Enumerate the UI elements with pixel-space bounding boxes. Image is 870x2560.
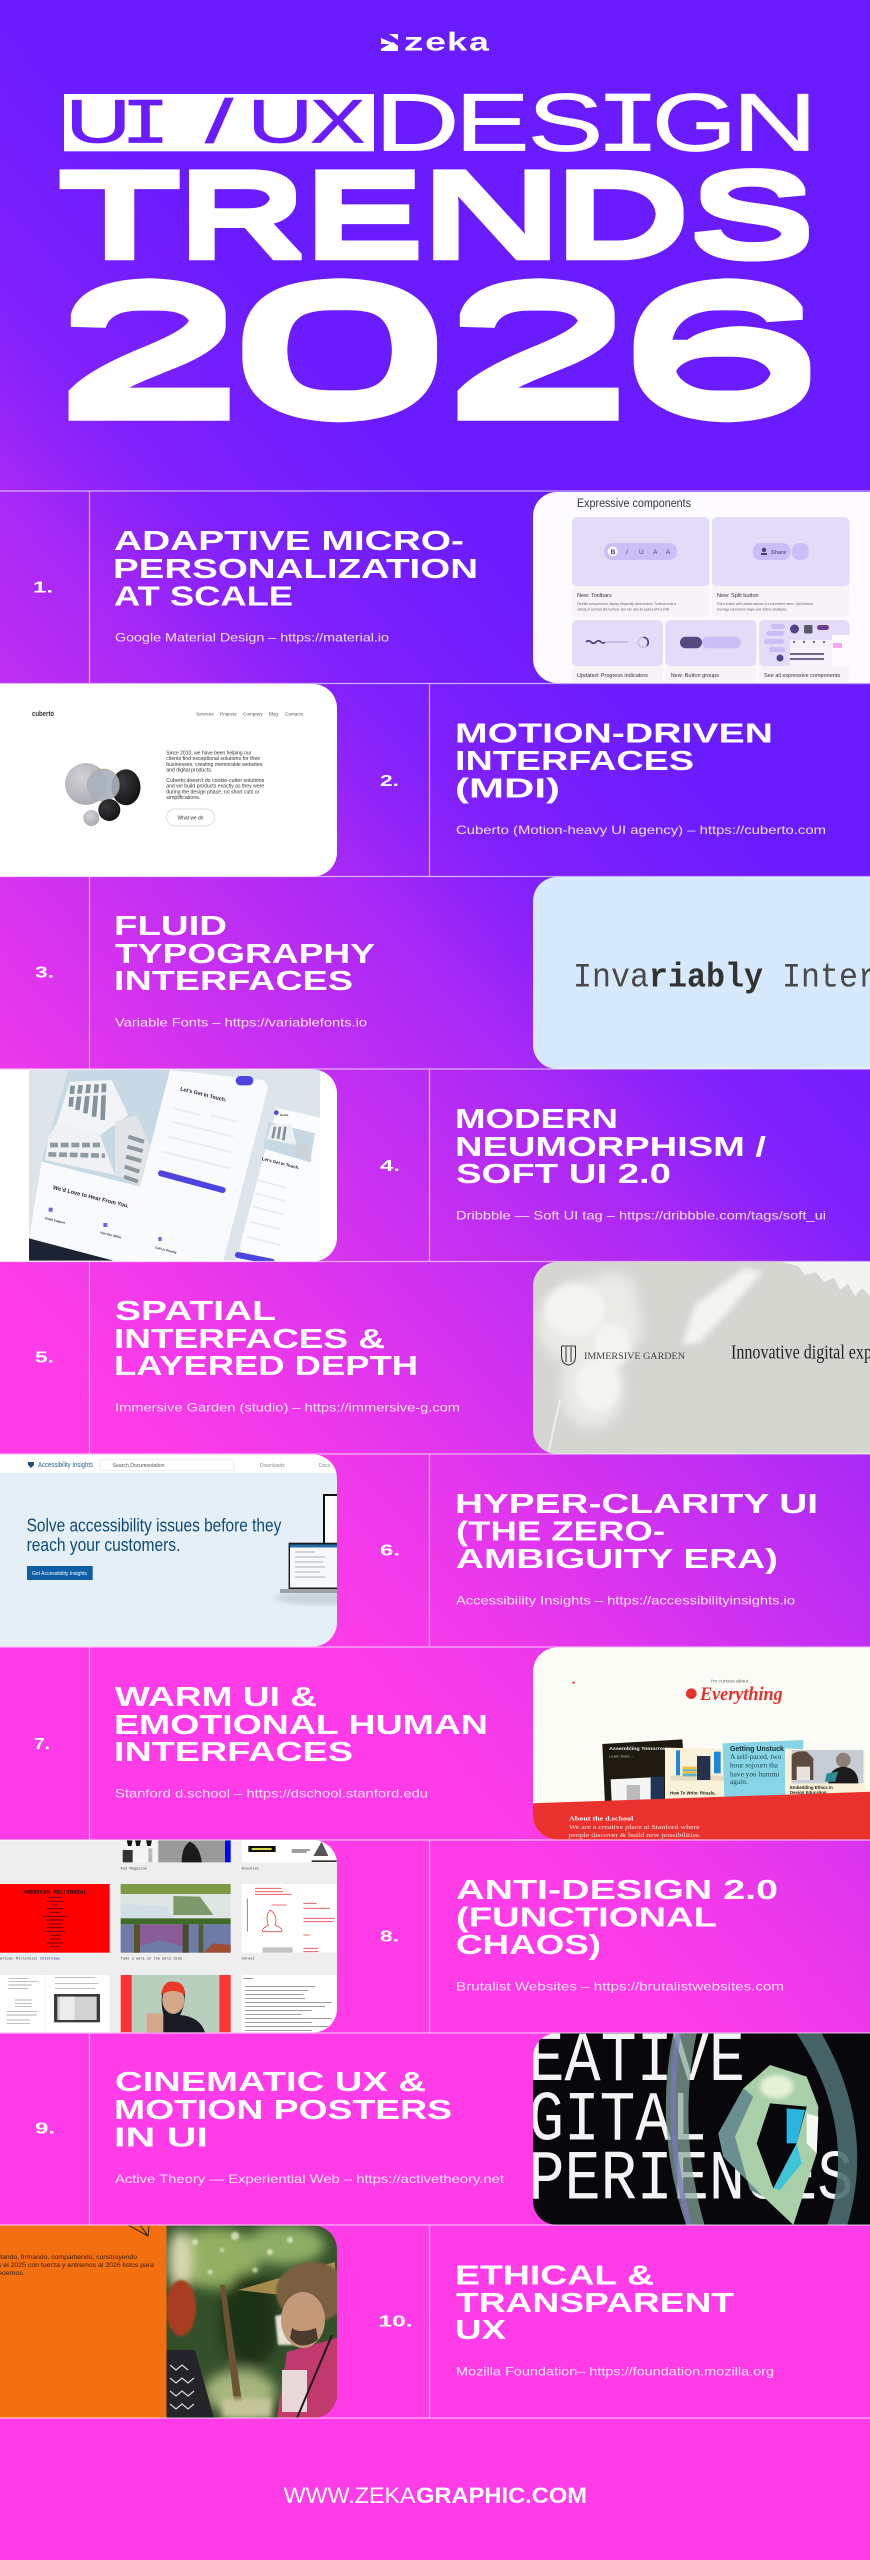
row 5 bbox=[35, 1262, 870, 1454]
heading: MOTION-DRIVEN bbox=[455, 718, 773, 748]
title line: DESIGN: I bbox=[595, 80, 661, 177]
screenshot: Material expressive components bbox=[533, 491, 870, 690]
screenshot: soft UI contact page bbox=[0, 1069, 337, 1262]
screenshot: Stanford d.school: people discover & build new possibilities. bbox=[568, 1832, 701, 1839]
screenshot: Cuberto site: Projects bbox=[220, 712, 237, 717]
heading: ETHICAL & bbox=[455, 2259, 654, 2290]
screenshot: Cuberto site: Services bbox=[196, 712, 214, 717]
screenshot: Cuberto site: businesses, creating memorable websites bbox=[166, 762, 263, 768]
screenshot: Stanford d.school: Assembling Tomorrow bbox=[609, 1746, 667, 1752]
number: 8. bbox=[380, 1929, 399, 1946]
screenshot: Mozilla Foundation video bbox=[0, 2225, 348, 2418]
screenshot: Stanford d.school: Getting Unstuck bbox=[730, 1746, 784, 1753]
screenshot: Cuberto site: during the design phase, no short cuts or bbox=[166, 790, 260, 796]
screenshot: Stanford d.school: We are a creative place at Stanford where bbox=[569, 1824, 700, 1831]
screenshot: soft UI contact page: Hotka bbox=[280, 1113, 289, 1117]
screenshot: Stanford d.school: Design Education bbox=[790, 1790, 827, 1795]
heading: INTERFACES & bbox=[114, 1323, 385, 1354]
screenshot: Material expressive components: New: Split button bbox=[717, 593, 759, 599]
screenshot: Stanford d.school: Embedding Ethics in bbox=[790, 1785, 833, 1790]
screenshot: Cuberto site: and digital products. bbox=[166, 768, 212, 774]
screenshot: Stanford d.school: About the d.school bbox=[569, 1815, 634, 1822]
title line: TRENDS: S bbox=[689, 146, 816, 284]
screenshot: Material expressive components: variety of controls like buttons, and can also be paired with a FAB. bbox=[577, 607, 670, 611]
heading: SOFT UI 2.0 bbox=[456, 1158, 671, 1189]
screenshot: Material expressive components: Updated: Progress indicators bbox=[577, 673, 648, 679]
screenshot: Accessibility Insights: Search Documentation bbox=[113, 1463, 165, 1469]
logo: zeka: zeka bbox=[403, 28, 490, 58]
screenshot: Accessibility Insights: Get Accessibility Insights bbox=[32, 1571, 87, 1577]
screenshot: Mozilla Foundation video: rtando, firmando, compartiendo, construyendo bbox=[0, 2254, 137, 2261]
number: 6. bbox=[380, 1543, 400, 1560]
number: 4. bbox=[380, 1158, 400, 1175]
number: 7. bbox=[34, 1736, 50, 1753]
screenshot: Brutalist Websites gallery bbox=[0, 1840, 337, 2033]
heading bbox=[113, 525, 478, 612]
number: 2. bbox=[380, 773, 399, 790]
heading: AMBIGUITY ERA) bbox=[456, 1543, 778, 1574]
screenshot: Accessibility Insights: Docs bbox=[319, 1463, 331, 1469]
source: Mozilla Foundation– https://foundation.mozilla.org bbox=[456, 2364, 774, 2378]
heading: SPATIAL bbox=[115, 1295, 276, 1326]
screenshot: Accessibility Insights bbox=[0, 1454, 365, 1647]
heading: UX bbox=[455, 2314, 506, 2345]
heading: CHAOS) bbox=[456, 1929, 601, 1960]
source: Dribbble — Soft UI tag – https://dribbble.com/tags/soft_ui bbox=[456, 1209, 826, 1223]
source: Active Theory — Experiential Web – https://activetheory.net bbox=[115, 2172, 505, 2186]
row 1 bbox=[33, 491, 870, 690]
screenshot: Material expressive components: leverage expressive shape and motion strategies. bbox=[717, 607, 787, 611]
source: Accessibility Insights – https://accessibilityinsights.io bbox=[456, 1593, 795, 1607]
title line: 2026: 0 bbox=[217, 246, 463, 455]
title line: TRENDS: D bbox=[553, 146, 692, 284]
screenshot: Stanford d.school: have you hummi bbox=[730, 1769, 779, 1778]
screenshot: Brutalist Websites gallery: Take a walk on the Wild Side bbox=[121, 1956, 182, 1961]
heading: CINEMATIC UX & bbox=[115, 2066, 426, 2097]
row 3 bbox=[35, 877, 870, 1069]
number: 1. bbox=[33, 580, 53, 597]
screenshot: Stanford d.school: hour sojourn tha bbox=[730, 1761, 779, 1770]
screenshot: Cuberto site: Since 2010, we have been helping our bbox=[166, 750, 252, 756]
screenshot: Cuberto site bbox=[0, 684, 337, 877]
heading: EMOTIONAL HUMAN bbox=[114, 1709, 488, 1740]
row 4 bbox=[0, 1069, 826, 1262]
screenshot: Stanford d.school: I'm curious about... bbox=[711, 1678, 753, 1684]
title line: DESIGN: G bbox=[652, 78, 737, 169]
heading: HYPER-CLARITY UI bbox=[455, 1488, 818, 1519]
heading: TYPOGRAPHY bbox=[115, 938, 375, 969]
heading: FLUID bbox=[114, 910, 227, 941]
title line: TRENDS: E bbox=[303, 146, 426, 284]
screenshot: Material expressive components: A bbox=[666, 549, 671, 556]
screenshot: Material expressive components: Flexible component to display frequently used actions. Toolbars hold a bbox=[577, 602, 676, 606]
screenshot: Stanford d.school bbox=[530, 1647, 870, 1845]
heading: TRANSPARENT bbox=[456, 2287, 734, 2318]
screenshot: Cuberto site: Blog bbox=[269, 712, 278, 717]
screenshot: Stanford d.school: A self-paced, two bbox=[730, 1752, 782, 1761]
title line: DESIGN: N bbox=[732, 78, 818, 169]
screenshot: Accessibility Insights: reach your customers. bbox=[27, 1535, 180, 1555]
screenshot: Material expressive components: Pair a button with related actions in a connected menu. Split buttons bbox=[717, 602, 813, 606]
screenshot: Brutalist Websites gallery: Blocklet bbox=[242, 1866, 259, 1871]
screenshot: Cuberto site: cuberto bbox=[32, 709, 54, 718]
screenshot: Cuberto site: Company bbox=[243, 712, 263, 717]
heading: (MDI) bbox=[455, 772, 560, 804]
screenshot: Accessibility Insights: Accessibility Insights bbox=[38, 1462, 93, 1469]
heading bbox=[114, 1295, 418, 1381]
title line: DESIGN: S bbox=[528, 78, 603, 169]
screenshot: Material expressive components: B bbox=[611, 549, 616, 556]
title line: DESIGN: E bbox=[455, 78, 530, 169]
heading: AT SCALE bbox=[114, 580, 293, 612]
screenshot: Cuberto site: clients find exceptional solutions for their bbox=[166, 756, 261, 762]
source: Google Material Design – https://material.io bbox=[115, 631, 389, 645]
screenshot: Material expressive components: A bbox=[653, 549, 658, 556]
screenshot: Stanford d.school: again. bbox=[730, 1777, 748, 1786]
source: Stanford d.school – https://dschool.stanford.edu bbox=[115, 1787, 428, 1801]
screenshot: Material expressive components: New: Button groups bbox=[671, 673, 719, 679]
screenshot: Material expressive components: See all expressive components bbox=[764, 673, 840, 679]
screenshot: Accessibility Insights: Solve accessibility issues before they bbox=[27, 1516, 281, 1536]
screenshot: Brutalist Websites gallery: Unreal bbox=[242, 1956, 255, 1961]
screenshot: soft UI contact page: Let's Get In Touch. bbox=[180, 1086, 227, 1104]
heading: ADAPTIVE MICRO- bbox=[114, 525, 464, 556]
title line: UI / UX label: / bbox=[205, 88, 233, 156]
screenshot: soft UI contact page: Call Us Directly bbox=[155, 1245, 177, 1255]
title line: TRENDS: T bbox=[57, 146, 182, 284]
heading bbox=[114, 910, 375, 996]
screenshot: Cuberto site: What we do bbox=[178, 816, 204, 822]
number: 10. bbox=[378, 2314, 412, 2330]
heading: MODERN bbox=[455, 1103, 618, 1134]
title line: TRENDS: R bbox=[177, 146, 306, 284]
title bbox=[48, 78, 833, 455]
heading bbox=[114, 2066, 452, 2152]
heading: MOTION POSTERS bbox=[114, 2094, 452, 2125]
footer: website url: GRAPHIC.COM bbox=[416, 2483, 587, 2508]
heading: (FUNCTIONAL bbox=[456, 1902, 717, 1932]
screenshot: soft UI contact page: We'd Love to Hear From You. bbox=[52, 1185, 130, 1210]
number: 3. bbox=[35, 965, 54, 982]
source: Immersive Garden (studio) – https://immersive-g.com bbox=[115, 1401, 460, 1415]
screenshot: Stanford d.school: How To Write: Rituals, bbox=[670, 1790, 716, 1795]
source: Cuberto (Motion-heavy UI agency) – https://cuberto.com bbox=[456, 823, 826, 837]
title line: UI / UX label: I bbox=[121, 90, 170, 162]
screenshot: Immersive Garden bbox=[533, 1262, 870, 1454]
heading: INTERFACES bbox=[114, 1736, 353, 1767]
title line: UI / UX label: X bbox=[310, 88, 365, 156]
heading: LAYERED DEPTH bbox=[114, 1350, 418, 1381]
title line: 2026: 2 bbox=[48, 246, 252, 455]
heading: INTERFACES bbox=[114, 965, 353, 996]
screenshot: Active Theory bbox=[528, 2022, 870, 2227]
heading: PERSONALIZATION bbox=[113, 553, 478, 584]
row 10 bbox=[0, 2225, 774, 2418]
screenshot: Cuberto site: and we build products exactly as they were bbox=[166, 784, 265, 790]
screenshot: Accessibility Insights: Downloads bbox=[260, 1463, 285, 1469]
screenshot: variable font specimen bbox=[533, 877, 870, 1069]
screenshot: Stanford d.school: Everything bbox=[699, 1684, 783, 1705]
source: Variable Fonts – https://variablefonts.io bbox=[115, 1016, 367, 1030]
screenshot: Brutalist Websites gallery: AMERICAN MILLENNIAL bbox=[23, 1888, 87, 1895]
heading: INTERFACES bbox=[455, 745, 694, 776]
heading bbox=[456, 1874, 778, 1960]
title line: UI / UX label bbox=[64, 88, 374, 162]
title line: UI / UX label: U bbox=[66, 88, 131, 156]
screenshot: Stanford d.school: Learn More → bbox=[609, 1754, 635, 1759]
number: 9. bbox=[35, 2121, 55, 2138]
row 7 bbox=[34, 1647, 870, 1845]
number: 5. bbox=[35, 1350, 54, 1367]
logo: zeka bbox=[381, 28, 490, 58]
screenshot: Mozilla Foundation video: s el 2025 con fuerza y entremos al 2026 listos para bbox=[0, 2262, 154, 2269]
heading: WARM UI & bbox=[115, 1681, 317, 1712]
row 8 bbox=[0, 1840, 784, 2033]
screenshot: Material expressive components: New: Toolbars bbox=[577, 593, 612, 599]
heading bbox=[455, 1103, 766, 1189]
title line: TRENDS: N bbox=[420, 146, 563, 284]
screenshot: Active Theory: EATIVE bbox=[528, 2022, 745, 2102]
screenshot: soft UI contact page: Let's Get In Touch. bbox=[261, 1156, 300, 1170]
screenshot: Material expressive components: U bbox=[639, 549, 644, 556]
screenshot: Cuberto site: simplifications. bbox=[166, 795, 200, 801]
title line: UI / UX label: U bbox=[248, 88, 313, 156]
title line: 2026: 2 bbox=[437, 246, 641, 455]
title line: DESIGN: D bbox=[375, 78, 460, 169]
screenshot: Immersive Garden: IMMERSIVE GARDEN bbox=[584, 1351, 686, 1361]
screenshot: Active Theory: GITAL bbox=[528, 2081, 707, 2161]
screenshot: Material expressive components: I bbox=[626, 549, 628, 556]
screenshot: soft UI contact page: Email Support bbox=[45, 1216, 65, 1225]
screenshot: Cuberto site: Cuberto doesn't do cookie-cutter solutions bbox=[166, 778, 265, 784]
screenshot: Brutalist Websites gallery: Kid Magazine bbox=[121, 1866, 147, 1871]
footer: website url: WWW.ZEKA bbox=[284, 2483, 416, 2508]
heading bbox=[455, 718, 773, 804]
heading: (THE ZERO- bbox=[456, 1516, 665, 1546]
heading bbox=[455, 2259, 734, 2345]
icon: zeka mark bbox=[381, 34, 398, 51]
row 9 bbox=[35, 2022, 870, 2227]
heading bbox=[114, 1681, 488, 1767]
heading bbox=[455, 1488, 818, 1574]
heading: ANTI-DESIGN 2.0 bbox=[456, 1874, 778, 1905]
row 2 bbox=[0, 684, 826, 877]
screenshot: Material expressive components: Share bbox=[771, 550, 786, 556]
title line: 2026: 6 bbox=[611, 246, 833, 455]
heading: IN UI bbox=[114, 2122, 208, 2152]
heading: NEUMORPHISM / bbox=[455, 1131, 766, 1162]
row 6 bbox=[0, 1454, 818, 1647]
source: Brutalist Websites – https://brutalistwebsites.com bbox=[456, 1979, 784, 1993]
screenshot: Material expressive components: Expressive components bbox=[577, 498, 691, 510]
screenshot: Cuberto site: Contacts bbox=[285, 712, 304, 717]
screenshot: soft UI contact page: Visit Our Office bbox=[100, 1230, 122, 1240]
